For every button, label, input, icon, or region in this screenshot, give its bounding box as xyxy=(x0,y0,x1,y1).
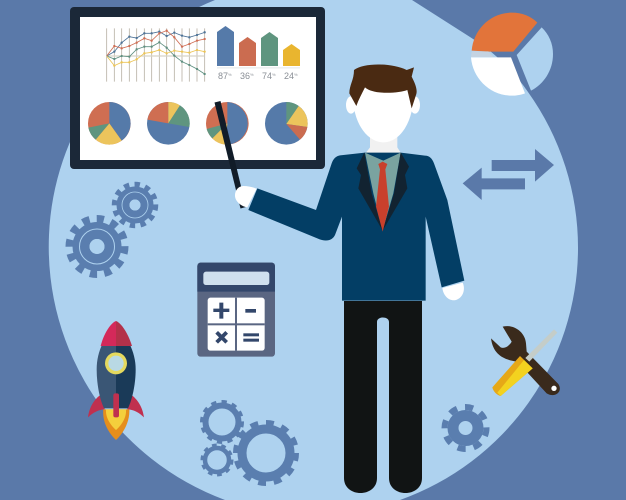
lapels xyxy=(357,152,409,231)
bar chart: 24 xyxy=(284,71,294,81)
left hand xyxy=(235,186,257,207)
pie chart 3 xyxy=(206,102,249,145)
screwdriver handle xyxy=(492,356,533,396)
rocket body xyxy=(97,343,116,408)
rocket nose xyxy=(101,321,116,346)
icon: rocket xyxy=(88,321,144,440)
bar chart xyxy=(217,26,300,81)
icon: wrench and screwdriver xyxy=(491,326,560,396)
icon: small gear xyxy=(115,185,155,225)
presentation screen xyxy=(70,7,325,169)
bar chart: % xyxy=(294,72,298,77)
bar chart: 74 xyxy=(262,71,272,81)
bar chart: % xyxy=(250,72,254,77)
icon: gear outline top xyxy=(202,402,242,442)
wrench xyxy=(491,326,560,395)
pie chart 2 xyxy=(147,102,190,145)
bar chart: % xyxy=(272,72,276,77)
icon: pie chart top right xyxy=(471,13,553,96)
rocket fins xyxy=(88,393,144,417)
hair xyxy=(349,64,417,108)
left ear xyxy=(346,96,356,114)
jacket xyxy=(248,153,464,301)
bar chart: 87 xyxy=(218,71,228,81)
shirt xyxy=(365,153,401,230)
icon: large gear xyxy=(70,220,124,274)
right hand xyxy=(442,283,464,300)
icon: calculator xyxy=(197,263,275,357)
right ear xyxy=(410,96,420,114)
rocket centre fin xyxy=(113,393,119,417)
pie charts row xyxy=(88,102,308,145)
face xyxy=(353,83,414,142)
icon: gear outline large xyxy=(236,424,296,482)
screwdriver shaft xyxy=(525,329,557,362)
pointer stick xyxy=(214,101,246,208)
necktie xyxy=(376,162,389,232)
rocket window xyxy=(105,352,127,374)
icon: gear solid lower right xyxy=(444,407,486,449)
presenter figure xyxy=(235,64,464,493)
neck xyxy=(366,132,401,161)
bar chart: % xyxy=(228,72,232,77)
icon: gear outline lower xyxy=(202,446,232,474)
bar chart: 36 xyxy=(240,71,250,81)
trousers xyxy=(344,301,422,493)
line chart xyxy=(107,28,205,82)
pie chart 4 xyxy=(265,102,308,145)
pie chart 1 xyxy=(88,102,131,145)
icon: exchange arrows xyxy=(463,149,554,200)
rocket flame xyxy=(103,409,129,440)
